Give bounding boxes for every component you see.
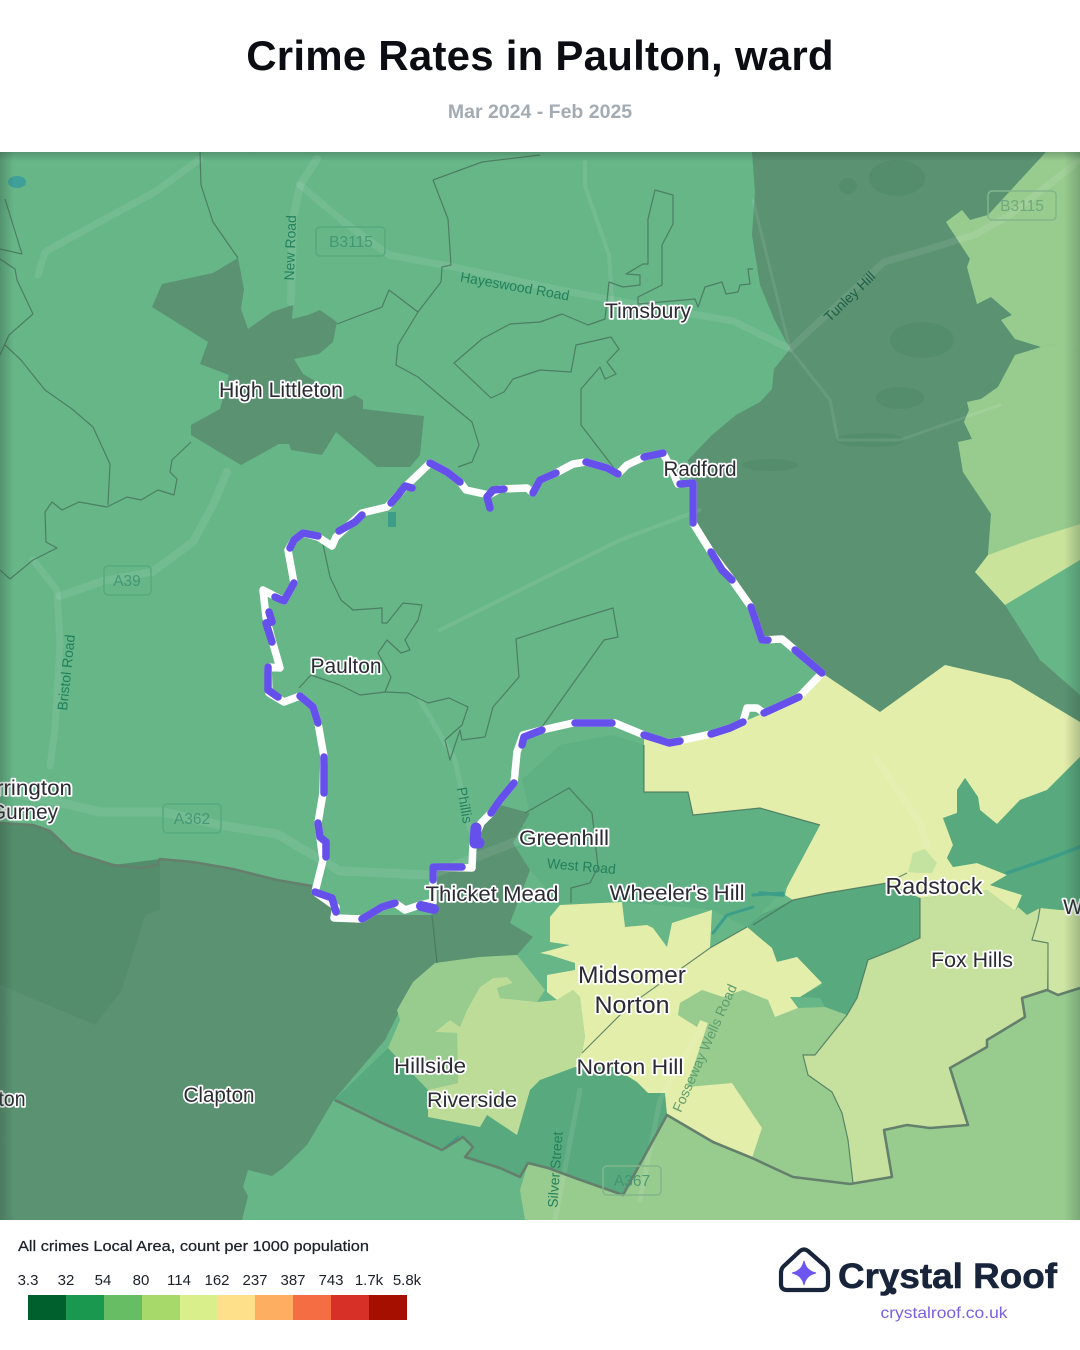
road shield: A362 (163, 804, 221, 833)
area: far east pale green (1032, 908, 1080, 995)
legend scale values: 5.8k (393, 1272, 422, 1289)
place labels: Wheeler's Hill (610, 882, 744, 905)
road shield: A367 (603, 1166, 661, 1195)
road name labels: Phillis (454, 786, 476, 825)
place labels: High Littleton (219, 379, 343, 402)
ward outline: Paulton (263, 453, 822, 919)
road name labels: New Road (281, 215, 299, 281)
road name labels (54, 215, 878, 1208)
place labels: Thicket Mead (426, 883, 558, 906)
road name labels: West Road (546, 855, 617, 877)
road name labels: Hayeswood Road (459, 269, 571, 304)
road shield: B3115 east (988, 191, 1056, 220)
water features (8, 176, 1080, 1147)
legend scale values (18, 1272, 422, 1289)
area: east of Fosseway light green (678, 990, 853, 1183)
place labels: Norton (594, 992, 670, 1019)
date range subtitle: Mar 2024 - Feb 2025 (448, 101, 632, 123)
faint road network (0, 159, 1080, 1220)
edge vignette (0, 152, 1080, 1220)
place labels: Greenhill (519, 827, 609, 850)
legend scale values: 387 (280, 1272, 306, 1289)
purple dashes on ward outline (266, 453, 822, 919)
road name labels: Fosseway Wells Road (669, 982, 740, 1114)
ward boundary hairlines (0, 152, 1080, 1195)
legend scale values: 32 (58, 1272, 74, 1289)
area: south-east light green (520, 988, 1080, 1220)
road shield: B3115 east: B3115 (1000, 198, 1044, 215)
area: Hillside (388, 955, 545, 1090)
area: small patch north of Radstock (908, 849, 937, 873)
logo wordmark: Crystal Roof (838, 1256, 1057, 1296)
area: below Wheeler's Hill medium green (747, 883, 920, 1015)
legend scale values: 237 (242, 1272, 268, 1289)
road shield: A39: A39 (113, 573, 141, 590)
road shield: B3115 west: B3115 (329, 234, 373, 251)
area: large pale yellow west of Radstock (644, 665, 1080, 911)
place labels: Riverside (427, 1089, 517, 1112)
darker area within Clapton band (118, 859, 158, 867)
area: eastern dark band (688, 152, 1080, 722)
legend scale values: 1.7k (355, 1272, 384, 1289)
area: Radstock medium green (943, 757, 1080, 915)
road shield: A39 (104, 566, 151, 595)
legend title: All crimes Local Area, count per 1000 population (18, 1238, 369, 1255)
legend scale values: 162 (204, 1272, 230, 1289)
place labels: Midsomer (578, 962, 686, 989)
place labels: Fox Hills (931, 949, 1013, 972)
map panel (0, 152, 1080, 1220)
place labels: Clapton (184, 1084, 254, 1107)
area: Wheeler's Hill medium green (786, 825, 820, 888)
icon: house with star (781, 1250, 828, 1290)
place labels: Hillside (394, 1055, 466, 1078)
legend scale values: 80 (133, 1272, 149, 1289)
road name labels: Bristol Road (54, 634, 78, 711)
legend scale values: 54 (95, 1272, 111, 1289)
area: Thicket Mead (432, 805, 533, 963)
area: Silver Street medium green (333, 1048, 667, 1195)
area: Riverside (428, 977, 585, 1135)
area: Midsomer Norton pale yellow (540, 902, 822, 1158)
legend scale values: 743 (318, 1272, 344, 1289)
place labels: Radford (664, 458, 736, 481)
darker woodland patches in eastern band (742, 160, 954, 471)
place labels: Norton Hill (576, 1056, 684, 1079)
road name labels: Tunley Hill (821, 268, 878, 325)
legend scale values: 114 (167, 1272, 191, 1289)
place labels (0, 300, 1080, 1112)
legend (18, 1238, 422, 1320)
road shield: A362: A362 (174, 811, 210, 828)
title: Crime Rates in Paulton, ward (246, 32, 834, 79)
area: Fox Hills (803, 890, 1048, 1183)
legend scale values: 3.3 (18, 1272, 38, 1289)
area: east pale strip (975, 524, 1080, 605)
area: east light green (958, 344, 1080, 555)
road shield: B3115 west (316, 227, 385, 256)
legend colour swatches (28, 1295, 407, 1320)
road name labels: Silver Street (544, 1131, 566, 1208)
logo: Crystal Roof (781, 1250, 1057, 1322)
place labels: Timsbury (605, 300, 691, 323)
area: Clapton dark band (0, 823, 437, 1220)
area: north-east light green (946, 152, 1080, 352)
website url: crystalroof.co.uk (880, 1305, 1009, 1322)
area: High Littleton, low crime (152, 258, 424, 467)
place labels: Paulton (310, 655, 382, 678)
place labels: Radstock (886, 873, 983, 899)
road shield: A367: A367 (614, 1173, 650, 1190)
